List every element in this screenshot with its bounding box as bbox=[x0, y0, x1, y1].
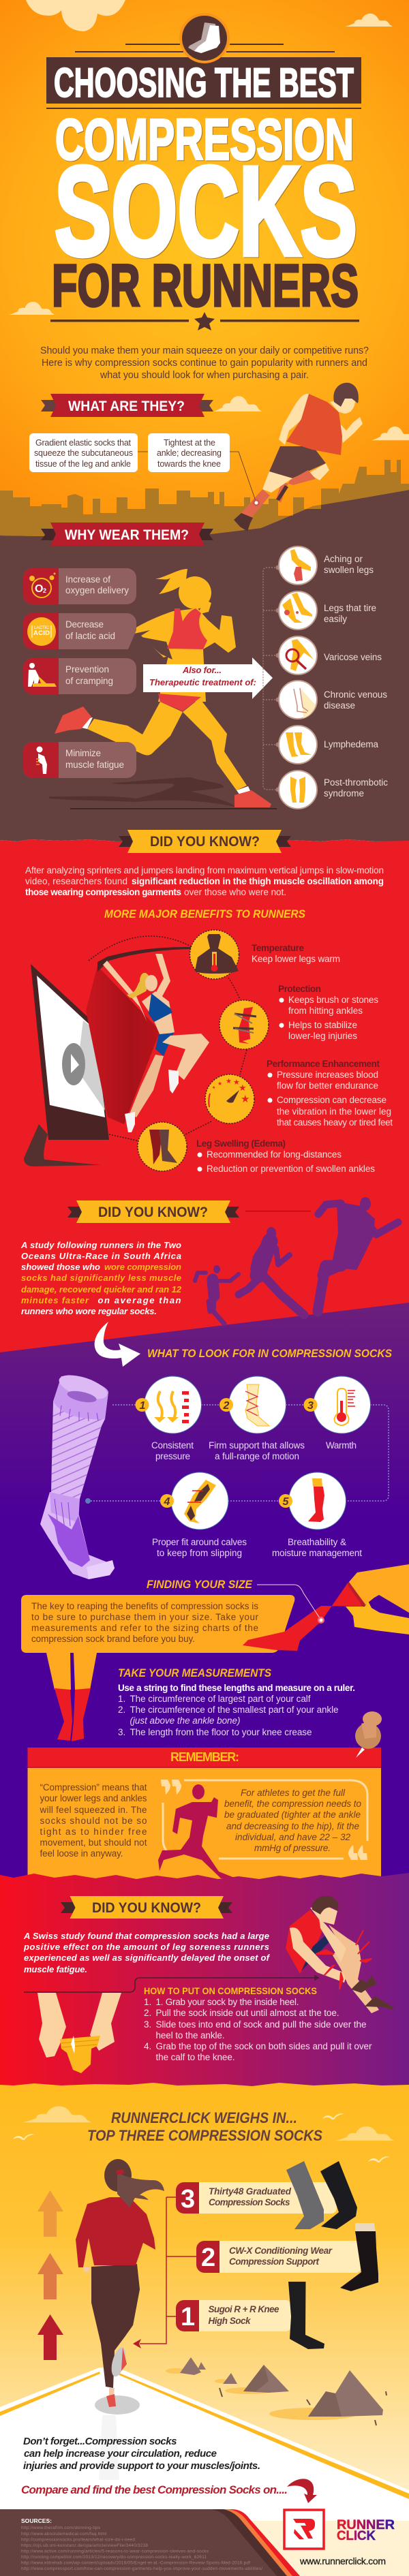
heading ribbon: did you know 1: DID YOU KNOW? bbox=[150, 834, 260, 850]
benefit: protection: Keeps brush or stones bbox=[288, 995, 378, 1005]
condition: aching legs: swollen legs bbox=[324, 565, 374, 575]
footer: http://www.compressport.com/how-can-compression-garments-help-you-improve-your-sudden-movements-abilities/ bbox=[21, 2566, 262, 2571]
benefit: performance enhancement: ★ bbox=[239, 1083, 247, 1093]
footer: https://ojs.ub.uni-konstanz.de/cpa/article/viewFile/3440/3238 bbox=[21, 2543, 148, 2548]
condition: tired legs: easily bbox=[324, 614, 347, 624]
text: swiss study: experienced as well as significantly delayed the onset of bbox=[24, 1953, 271, 1963]
footer: http://www.therafirm.com/donning-tips bbox=[21, 2526, 101, 2530]
panel: remember: feel loose in anyway. bbox=[40, 1848, 123, 1859]
clouds and birds bbox=[13, 2107, 394, 2162]
benefit: protection: Protection bbox=[278, 984, 321, 994]
rank 1 card: Sugoi R + R Knee bbox=[209, 2304, 279, 2314]
intro text: what you should look for when purchasing a pair. bbox=[100, 370, 309, 381]
footer: SOURCES: bbox=[21, 2517, 52, 2524]
feature 2: firm support: a full-range of motion bbox=[215, 1451, 299, 1461]
panel: benefit muscle fatigue: Minimize bbox=[65, 748, 101, 758]
panel: remember: For athletes to get the full bbox=[241, 1788, 346, 1798]
rank 2 card bbox=[196, 2223, 378, 2291]
logo: runnerclick: CLICK bbox=[337, 2529, 376, 2543]
call to action: Compare and find the best Compression Socks on.... bbox=[21, 2483, 288, 2496]
rocks bbox=[166, 2357, 387, 2425]
heading: more major benefits: MORE MAJOR BENEFITS TO RUNNERS bbox=[104, 907, 306, 920]
rank 3 card: 3 bbox=[181, 2185, 195, 2214]
text: take your measurements: 3. bbox=[118, 1727, 125, 1737]
text: take your measurements bbox=[118, 1666, 355, 1737]
intro text: Here is why compression socks continue to gain popularity with runners and bbox=[42, 358, 367, 369]
arrow: curved white bbox=[95, 1322, 140, 1367]
icon: play button bbox=[62, 1043, 85, 1085]
woman runner bbox=[49, 569, 277, 809]
callout: therapeutic treatment: Therapeutic treatment of: bbox=[149, 677, 256, 687]
icon: oxygen bbox=[29, 572, 56, 598]
text: swiss study: muscle fatigue. bbox=[24, 1964, 87, 1974]
footer: http://www.elitrehab.com/wp-content/uploads/2016/05/Engel-et-al.-Compression-Review-Sports-Med-2016.pdf bbox=[21, 2560, 250, 2566]
rank 1 card bbox=[176, 2282, 324, 2349]
panel: benefit oxygen delivery: oxygen delivery bbox=[65, 585, 129, 595]
rank 3 card: Compression Socks bbox=[209, 2197, 290, 2207]
panel: remember: your lower legs and ankles bbox=[40, 1793, 147, 1803]
benefit: protection: lower-leg injuries bbox=[288, 1031, 357, 1041]
text: how to put on: 2. bbox=[144, 2008, 151, 2018]
text: take your measurements: The circumference of the smallest part of your ankle bbox=[130, 1705, 338, 1715]
benefit: performance enhancement: ★ bbox=[217, 1081, 222, 1087]
text: thigh muscle oscillation: video, researchers found bbox=[25, 876, 127, 886]
text: swiss study: A Swiss study found that compression socks had a large bbox=[23, 1931, 269, 1941]
icon: fatigue bbox=[36, 747, 47, 774]
text: two oceans study bbox=[20, 1240, 182, 1316]
benefit: temperature: Keep lower legs warm bbox=[252, 954, 340, 964]
header emblem bbox=[46, 13, 361, 109]
connector to knee bbox=[138, 452, 256, 503]
heading: top three compression socks: TOP THREE COMPRESSION SOCKS bbox=[87, 2127, 322, 2144]
panel: finding your size: The key to reaping the benefits of compression socks is bbox=[31, 1601, 258, 1611]
panel: benefit cramping bbox=[23, 658, 136, 694]
logo: runnerclick: www.runnerclick.com bbox=[299, 2556, 386, 2566]
card: tightest at the ankle: ankle; decreasing bbox=[157, 448, 222, 458]
benefit: leg swelling: Reduction or prevention of swollen ankles bbox=[207, 1164, 375, 1174]
logo: runnerclick: RUNNER bbox=[337, 2518, 395, 2532]
callout: therapeutic treatment bbox=[143, 657, 273, 699]
text: thigh muscle oscillation: over those who were not. bbox=[184, 887, 286, 897]
product: gray and black socks bbox=[286, 2161, 357, 2229]
panel: remember: be graduated (tighter at the ankle bbox=[224, 1810, 361, 1820]
text: thigh muscle oscillation bbox=[25, 865, 384, 897]
panel: remember: and decreasing to the hip), fit the bbox=[226, 1821, 359, 1831]
heading ribbon: why wear them bbox=[41, 523, 213, 546]
text: take your measurements: (just above the ankle bone) bbox=[130, 1716, 240, 1726]
condition: chronic venous disease bbox=[275, 681, 387, 719]
panel: remember: tight as to hinder free bbox=[40, 1827, 147, 1837]
product: tall black sock bbox=[340, 2223, 378, 2291]
feature 5: breathability: moisture management bbox=[272, 1548, 362, 1558]
benefit: protection bbox=[219, 984, 378, 1049]
text: take your measurements: 1. bbox=[118, 1694, 125, 1704]
feature 1: consistent pressure: Consistent bbox=[151, 1440, 194, 1450]
panel: finding your size bbox=[21, 1595, 294, 1741]
condition: tired legs: Legs that tire bbox=[324, 603, 376, 613]
heading: finding your size: FINDING YOUR SIZE bbox=[147, 1578, 253, 1591]
rank 2 card: CW-X Conditioning Wear bbox=[229, 2246, 333, 2256]
feature 3: warmth bbox=[304, 1376, 371, 1450]
panel: benefit muscle fatigue: muscle fatigue bbox=[65, 760, 124, 770]
benefit: temperature bbox=[190, 930, 340, 979]
rank 1 card: High Sock bbox=[209, 2316, 252, 2326]
benefit: leg swelling: Recommended for long-distances bbox=[207, 1149, 342, 1160]
benefit: performance enhancement: ★ bbox=[241, 1093, 249, 1105]
feature 4: proper fit bbox=[152, 1472, 247, 1558]
panel: remember: “Compression” means that bbox=[40, 1782, 147, 1793]
title banner: choosing the best bbox=[46, 13, 361, 109]
feature 2: firm support bbox=[209, 1376, 305, 1461]
condition: post-thrombotic syndrome: syndrome bbox=[324, 788, 364, 798]
condition: aching legs: Aching or bbox=[324, 554, 363, 564]
text: how to put on: 3. bbox=[144, 2019, 151, 2030]
feature 3: warmth: Warmth bbox=[326, 1440, 357, 1450]
benefit: performance enhancement: Pressure increases blood bbox=[277, 1070, 378, 1080]
rank 1 card: 1 bbox=[181, 2303, 195, 2331]
feature 3: warmth: 3 bbox=[307, 1400, 314, 1412]
footer: http://www.absolutemedical.com/faq.html bbox=[21, 2532, 107, 2536]
heading ribbon: did you know 3 bbox=[61, 1896, 232, 1919]
runner in orange shirt bbox=[138, 383, 363, 531]
background: orange sky bbox=[0, 0, 409, 545]
text: two oceans study: minutes faster bbox=[21, 1295, 89, 1305]
feature 4: proper fit: 4 bbox=[164, 1496, 170, 1508]
footer: http://running.competitor.com/2013/12/recovery/do-compression-socks-really-work_62611 bbox=[21, 2555, 207, 2560]
text: thigh muscle oscillation: those wearing compression garments bbox=[25, 887, 181, 897]
panel: finding your size: compression sock brand before you buy. bbox=[31, 1634, 195, 1644]
condition: aching legs bbox=[275, 546, 374, 585]
background: red section bbox=[0, 839, 409, 1363]
heading ribbon: did you know 3: DID YOU KNOW? bbox=[92, 1900, 201, 1916]
background: purple section bbox=[0, 1303, 409, 1880]
illustration: leg being measured bbox=[243, 1564, 409, 1651]
feature 2: firm support: 2 bbox=[222, 1400, 229, 1412]
panel: remember: socks should not be so bbox=[40, 1816, 147, 1826]
condition: post-thrombotic syndrome: Post-thrombotic bbox=[324, 777, 388, 788]
icon: push pin bbox=[355, 1711, 382, 1758]
benefit: performance enhancement bbox=[205, 1059, 393, 1128]
text: take your measurements: The circumference of largest part of your calf bbox=[130, 1694, 311, 1704]
text: how to put on: 1. bbox=[144, 1997, 151, 2007]
shadow bbox=[49, 777, 235, 807]
text: how to put on: heel to the ankle. bbox=[155, 2030, 225, 2040]
text: take your measurements: TAKE YOUR MEASUREMENTS bbox=[118, 1666, 272, 1679]
text: thigh muscle oscillation: After analyzing sprinters and jumpers landing from maximum vertical jumps in slow-motion bbox=[25, 865, 384, 875]
text: take your measurements: Use a string to find these lengths and measure on a ruler. bbox=[118, 1683, 355, 1693]
card: tightest at the ankle: Tightest at the bbox=[164, 438, 215, 448]
text: don't forget: can help increase your circulation, reduce bbox=[24, 2448, 217, 2459]
heading ribbon: did you know 1 bbox=[119, 830, 291, 853]
benefit: performance enhancement: ★ bbox=[226, 1078, 232, 1085]
arrows: upward progress bbox=[37, 2190, 63, 2360]
text: two oceans study: wore compression bbox=[104, 1262, 181, 1272]
panel: remember bbox=[27, 1748, 381, 1884]
feature 4: proper fit: to keep from slipping bbox=[157, 1548, 242, 1558]
text: take your measurements: 2. bbox=[118, 1705, 125, 1715]
card: gradient elastic socks: Gradient elastic socks that bbox=[35, 438, 132, 448]
star divider bbox=[50, 312, 359, 330]
text: how to put on: Slide toes into end of sock and pull the side over the bbox=[155, 2019, 367, 2030]
heading ribbon: did you know 2 bbox=[67, 1200, 311, 1223]
benefit: leg swelling: Leg Swelling (Edema) bbox=[196, 1138, 286, 1149]
illustration: purple compression sock bbox=[40, 1370, 115, 1579]
panel: remember: REMEMBER: bbox=[170, 1750, 239, 1764]
text: how to put on: Pull the sock inside out until almost at the toe. bbox=[155, 2008, 339, 2018]
heading ribbon: what are they bbox=[41, 394, 213, 417]
feature 1: consistent pressure bbox=[135, 1376, 202, 1461]
condition: varicose veins: Varicose veins bbox=[324, 652, 382, 662]
skyline bbox=[0, 460, 409, 536]
rank 2 card: Compression Support bbox=[229, 2256, 319, 2267]
rank 2 card: 2 bbox=[201, 2244, 215, 2272]
illustration: hands pulling on sock bbox=[37, 1993, 121, 2073]
panel: benefit oxygen delivery bbox=[23, 568, 136, 604]
illustration: runner with sore leg bbox=[286, 1896, 394, 2013]
text: how to put on: 1. Grab your sock by the inside heel. bbox=[155, 1997, 299, 2007]
background: brown ground bbox=[0, 490, 409, 841]
icon: lactic acid: LACTIC bbox=[34, 625, 49, 630]
text: how to put on: the calf to the knee. bbox=[155, 2052, 234, 2062]
connector: ranking bracket bbox=[140, 2197, 196, 2344]
text: two oceans study: showed those who bbox=[21, 1262, 100, 1272]
benefit: performance enhancement: the vibration in the lower leg bbox=[277, 1106, 391, 1117]
road bbox=[0, 2368, 409, 2521]
card: tightest at the ankle: towards the knee bbox=[157, 459, 221, 469]
heading ribbon: what are they: WHAT ARE THEY? bbox=[68, 399, 185, 414]
panel: remember: individual, and have 22 – 32 bbox=[235, 1832, 350, 1842]
panel: benefit lactic acid: of lactic acid bbox=[65, 631, 115, 641]
quote frame bbox=[161, 1780, 367, 1860]
benefit: leg swelling bbox=[138, 1122, 375, 1174]
panel: benefit muscle fatigue bbox=[23, 742, 136, 778]
feature 1: consistent pressure: pressure bbox=[155, 1451, 190, 1461]
panel: remember: mmHg of pressure. bbox=[254, 1843, 331, 1853]
benefit: temperature: Temperature bbox=[252, 943, 304, 953]
condition: tired legs bbox=[275, 591, 376, 630]
icon: lactic acid: ACID bbox=[33, 630, 50, 637]
text: don't forget bbox=[23, 2436, 260, 2472]
logo: runnerclick bbox=[284, 2510, 395, 2566]
condition: varicose veins bbox=[275, 636, 382, 674]
panel: finding your size: to be sure to purchase them in your size. Take your bbox=[31, 1612, 259, 1622]
text: how to put on bbox=[144, 1985, 372, 2062]
feature 5: breathability: 5 bbox=[282, 1496, 289, 1508]
condition: lymphedema bbox=[275, 726, 378, 764]
panel: benefit lactic acid bbox=[23, 613, 136, 649]
feature 4: proper fit: Proper fit around calves bbox=[152, 1537, 247, 1547]
text: two oceans study: runners who wore regular socks. bbox=[21, 1306, 157, 1316]
callout: therapeutic treatment: Also for... bbox=[182, 665, 222, 675]
condition: chronic venous disease: disease bbox=[324, 700, 355, 711]
text: don't forget: Don’t forget...Compression socks bbox=[23, 2436, 177, 2447]
text: swiss study: positive effect on the amount of leg soreness runners bbox=[23, 1942, 269, 1952]
condition: chronic venous disease: Chronic venous bbox=[324, 689, 387, 700]
heading ribbon: did you know 2: DID YOU KNOW? bbox=[98, 1205, 208, 1220]
rank 3 card bbox=[176, 2161, 357, 2229]
footer: http://www.active.com/running/articles/5-reasons-to-wear-compression-sleeves-and-socks bbox=[21, 2549, 209, 2554]
panel: benefit cramping: of cramping bbox=[65, 676, 113, 686]
benefit: protection: from hitting ankles bbox=[288, 1006, 363, 1016]
benefit: performance enhancement: Performance Enhancement bbox=[267, 1059, 380, 1069]
icon: lactic acid bbox=[27, 617, 56, 646]
product: black knee sock bbox=[288, 2282, 324, 2349]
text: swiss study bbox=[23, 1931, 271, 1974]
intro text: Should you make them your main squeeze on your daily or competitive runs? bbox=[40, 345, 369, 356]
magenta running silhouette bbox=[158, 1784, 236, 1878]
heading ribbon: why wear them: WHY WEAR THEM? bbox=[65, 527, 189, 543]
feature 1: consistent pressure: 1 bbox=[139, 1400, 146, 1412]
intro text bbox=[40, 345, 369, 381]
panel: benefit cramping: Prevention bbox=[65, 664, 109, 674]
text: thigh muscle oscillation: significant reduction in the thigh muscle oscillation among bbox=[132, 876, 384, 886]
background: red to purple section bbox=[0, 1873, 409, 2089]
text: two oceans study: A study following runners in the Two bbox=[20, 1240, 181, 1250]
text: two oceans study: Oceans Ultra-Race in South Africa bbox=[21, 1251, 181, 1261]
feature 5: breathability bbox=[272, 1472, 362, 1558]
text: how to put on: Grab the top of the sock on both sides and pull it over bbox=[155, 2041, 372, 2051]
clouds bbox=[9, 0, 409, 440]
text: how to put on: 4. bbox=[144, 2041, 151, 2051]
arrow: curved red bbox=[287, 2479, 317, 2503]
panel: remember: will feel squeezed in. The bbox=[40, 1805, 147, 1815]
benefit: performance enhancement: Compression can decrease bbox=[277, 1095, 387, 1105]
condition: lymphedema: Lymphedema bbox=[324, 739, 378, 749]
text: two oceans study: socks had significantly less muscle bbox=[21, 1273, 181, 1283]
condition: post-thrombotic syndrome bbox=[275, 771, 388, 809]
heading: what to look for: WHAT TO LOOK FOR IN COMPRESSION SOCKS bbox=[147, 1348, 392, 1360]
background: yellow section bbox=[0, 2083, 409, 2576]
silhouettes: three runners bbox=[195, 1197, 398, 1324]
text: don't forget: injuries and provide support to your muscles/joints. bbox=[23, 2460, 260, 2472]
video screen bbox=[24, 964, 109, 1166]
text: how to put on: HOW TO PUT ON COMPRESSION SOCKS bbox=[144, 1985, 317, 1996]
panel: benefit lactic acid: Decrease bbox=[65, 619, 104, 630]
woman runner from behind bbox=[76, 2159, 164, 2415]
heading: top three compression socks: RUNNERCLICK WEIGHS IN... bbox=[111, 2109, 297, 2126]
benefit: performance enhancement: ★ bbox=[212, 1085, 215, 1090]
benefit: protection: Helps to stabilize bbox=[288, 1020, 357, 1030]
dotted path through features bbox=[88, 1405, 389, 1501]
card: gradient elastic socks: tissue of the leg and ankle bbox=[35, 459, 131, 469]
text: two oceans study: damage, recovered quicker and ran 12 bbox=[21, 1284, 182, 1294]
feature 5: breathability: Breathability & bbox=[288, 1537, 346, 1547]
connector line bbox=[24, 1976, 318, 1992]
icon: oxygen: 2 bbox=[43, 587, 46, 594]
panel: finding your size: measurements and refer to the sizing charts of the bbox=[31, 1623, 258, 1633]
benefit: performance enhancement: ★ bbox=[233, 1078, 240, 1087]
text: take your measurements: The length from the floor to your knee crease bbox=[130, 1727, 312, 1737]
pole vaulter bbox=[86, 947, 209, 1132]
footer bbox=[0, 2509, 300, 2576]
rank 3 card: Thirty48 Graduated bbox=[209, 2186, 292, 2197]
heading: top three compression socks bbox=[87, 2109, 322, 2144]
text: two oceans study: on average than bbox=[98, 1295, 181, 1305]
icon: cramping bbox=[28, 663, 57, 687]
dotted orbit bbox=[89, 936, 247, 1141]
panel: benefit oxygen delivery: Increase of bbox=[65, 574, 110, 585]
feature 2: firm support: Firm support that allows bbox=[209, 1440, 305, 1450]
card: tightest at the ankle bbox=[148, 433, 230, 472]
benefit: performance enhancement: flow for better endurance bbox=[277, 1081, 378, 1091]
card: gradient elastic socks bbox=[29, 433, 138, 472]
icon: oxygen: O bbox=[35, 583, 43, 595]
benefit: performance enhancement: that causes heavy or tired feet bbox=[277, 1117, 393, 1128]
footer: http://compressionsocks.pro/learn/what-size-do-i-need bbox=[21, 2537, 135, 2543]
panel: remember: benefit, the compression needs to bbox=[224, 1799, 361, 1809]
card: gradient elastic socks: squeeze the subcutaneous bbox=[34, 448, 133, 458]
panel: remember: movement, but should not bbox=[40, 1837, 147, 1848]
dotted connector bbox=[263, 568, 278, 790]
